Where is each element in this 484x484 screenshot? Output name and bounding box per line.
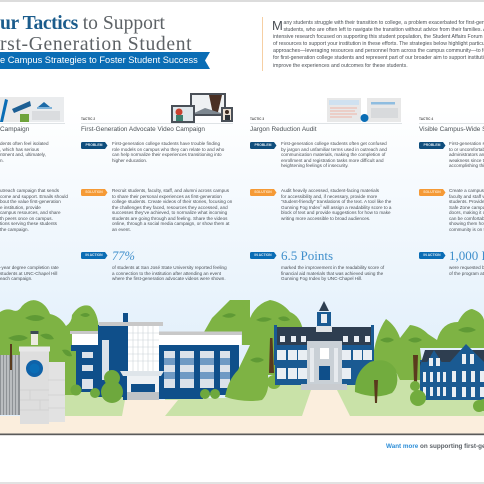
illustration: video monitors (171, 93, 233, 123)
tag: problem: PROBLEM (424, 143, 440, 147)
tactic 3 solution text: Gunning Fog Index1 will assign a readability score to a (281, 203, 391, 210)
tactic 2 in action text: of students at San José State University reported feeling (112, 265, 227, 270)
tactic 3 problem text: heightening feelings of insecurity. (281, 163, 349, 168)
tactic 1 solution text: tions serving these students (0, 221, 57, 226)
title: ur Tactics to Support (0, 13, 165, 34)
tactic 3 problem text: communication materials, making the completion of (281, 152, 385, 157)
intro paragraph (273, 20, 484, 69)
trees right of hall (374, 309, 484, 382)
building: main hall (274, 301, 374, 390)
tactic 2 problem text: role models on campus who they can relate to and who (112, 146, 224, 152)
tactic 4 solution text (449, 188, 484, 232)
tag: problem (418, 142, 446, 149)
tag: solution (250, 189, 276, 196)
tag: solution: SOLUTION (254, 190, 272, 194)
tactic 1 solution text: th peers once on campus. (0, 216, 53, 220)
tag: in action: IN ACTION (254, 253, 272, 257)
tactic 1 problem text: ntment and, ultimately, (0, 152, 46, 157)
tag: problem: PROBLEM (255, 143, 271, 147)
tactic 1 problem text: n. (0, 158, 4, 162)
illustration: jargon documents (327, 98, 401, 122)
tactic 1 solution text: bout the value first-generation (0, 199, 61, 204)
tactic 1 in action text: each campaign. (0, 276, 32, 281)
tactic 3 problem text: First-generation college students often get confused (281, 141, 387, 146)
tag: problem: PROBLEM (86, 143, 102, 147)
tactic 2 heading: First-Generation Advocate Video Campaign (81, 126, 205, 133)
tactic 1 solution text: e institution, provide (0, 204, 41, 210)
tactic 1 solution text: the campaign. (0, 226, 29, 232)
tag: problem (80, 142, 108, 149)
tactic 3 solution text: Audit heavily accessed, student-facing materials (281, 188, 379, 193)
tactic 1 in action text: students at UNC-Chapel Hill (0, 270, 57, 276)
building: residence hall (420, 344, 484, 400)
tactic 2 solution text: the challenges they faced, resources they accessed, and (112, 204, 228, 210)
tactic 3 solution text: writing more accessible to broad audiences. (281, 216, 370, 220)
foreground trees and shrubs (355, 360, 484, 412)
tactic 3 label: TACTIC 3 (250, 117, 264, 121)
tactic 3 heading: Jargon Reduction Audit (250, 126, 317, 133)
tactic 3 in action text: financial aid materials that was achieved using the (281, 270, 383, 276)
tactic 2 solution text: students are going through and feeling. Share the videos (112, 216, 227, 220)
tag: in action: IN ACTION (423, 253, 441, 257)
tactic 2 problem text: First-generation college students have trouble finding (112, 141, 220, 146)
tactic 1 solution text: campus resources, and share (0, 210, 61, 215)
subtitle ribbon: e Campus Strategies to Foster Student Success (0, 55, 198, 65)
tactic 2 solution text (112, 188, 232, 232)
tactic 2 label: TACTIC 2 (81, 117, 95, 121)
tactic 4 label: TACTIC 4 (419, 117, 433, 121)
tag: problem (250, 142, 276, 149)
building: student union (70, 300, 250, 400)
tactic 3 solution text: block of text and provide suggestions for how to make (281, 210, 391, 215)
tactic 2 problem text: higher education. (112, 158, 147, 162)
tag: solution (418, 189, 446, 196)
bottom border (0, 482, 484, 484)
tactic 2 in action text (112, 265, 227, 281)
tactic 1 in action text: -year degree completion rate (0, 265, 59, 270)
tactic 1 solution text: utreach campaign that sends (0, 188, 59, 193)
intro accent line (262, 17, 263, 71)
tactic 1 heading: Campaign (0, 126, 29, 133)
tactic 2 solution text: successes they’ve achieved, to normalize what incoming (112, 210, 227, 215)
trees left of hall (242, 300, 303, 389)
tactic 4 problem text (449, 141, 484, 168)
tactic 2 solution text: an event. (112, 226, 131, 232)
tactic 2 in action text: where the first-generation advocate videos were shown. (112, 276, 226, 281)
top border (0, 0, 484, 2)
tactic 3 in action text: Gunning Fog Index by UNC-Chapel Hill. (281, 276, 362, 281)
tactic 1 solution text: come and support. Emails should (0, 194, 68, 198)
lawn and ground (0, 375, 484, 435)
tactic 3 problem text: enrollment and registration tasks more difficult and (281, 158, 384, 162)
tactic 1 problem text: dents often feel isolated (0, 141, 49, 146)
tree in front of union right (225, 345, 272, 401)
illustration: campaign materials (0, 97, 64, 122)
tactic 4 in action text (449, 265, 484, 276)
gate (0, 331, 65, 424)
tag: in action (80, 252, 108, 259)
title (0, 13, 192, 55)
intro paragraph: improve the experiences and outcomes for these students. (273, 63, 408, 69)
tactic 3 in action text: marked the improvement in the readability score of (281, 265, 384, 270)
tactic 2 solution text: college students. Create videos of their stories, focusing on (112, 199, 232, 204)
tactic 3 problem text (281, 141, 387, 168)
tactic 2 solution text: to share their personal experiences as first-generation (112, 194, 222, 198)
tag: in action (250, 252, 276, 259)
intro drop cap: M (272, 18, 283, 32)
tactic 1 problem text: , which has serious (0, 146, 39, 152)
tactic 3 in action text (281, 265, 384, 281)
tactic 3 statistic: 6.5 Points (281, 248, 333, 263)
tactic 3 solution text: “student-friendly” translations of the text. A tool like the (281, 199, 391, 204)
tag: solution (80, 189, 108, 196)
trees left (0, 300, 99, 395)
tag: solution: SOLUTION (85, 190, 103, 194)
tactic 3 solution text: for accessibility and, if necessary, provide more (281, 194, 377, 198)
subtitle ribbon (0, 52, 210, 69)
title: rst-Generation Student (0, 34, 192, 55)
tactic 2 problem text (112, 141, 224, 163)
tactic 1 solution text (0, 188, 68, 232)
tactic 1 in action text (0, 265, 59, 281)
tactic 2 solution text: online, through a social media campaign, or show them at (112, 221, 229, 226)
shrubs at union (70, 370, 220, 403)
tag: in action (418, 252, 446, 259)
tactic 3 problem text: by jargon and unfamiliar terms used in outreach and (281, 146, 387, 152)
tactic 2 statistic: 77% (112, 249, 135, 263)
tactic 3 solution text (281, 188, 392, 221)
tactic 2 solution text: Recruit students, faculty, staff, and alumni across campus (112, 188, 229, 193)
tactic 1 problem text (0, 141, 49, 162)
tag: in action: IN ACTION (85, 253, 103, 257)
tag: solution: SOLUTION (423, 190, 441, 194)
tactic 2 problem text: can help normalize their experiences transitioning into (112, 152, 222, 157)
tactic 2 in action text: a connection to the institution after attending an event (112, 270, 221, 276)
